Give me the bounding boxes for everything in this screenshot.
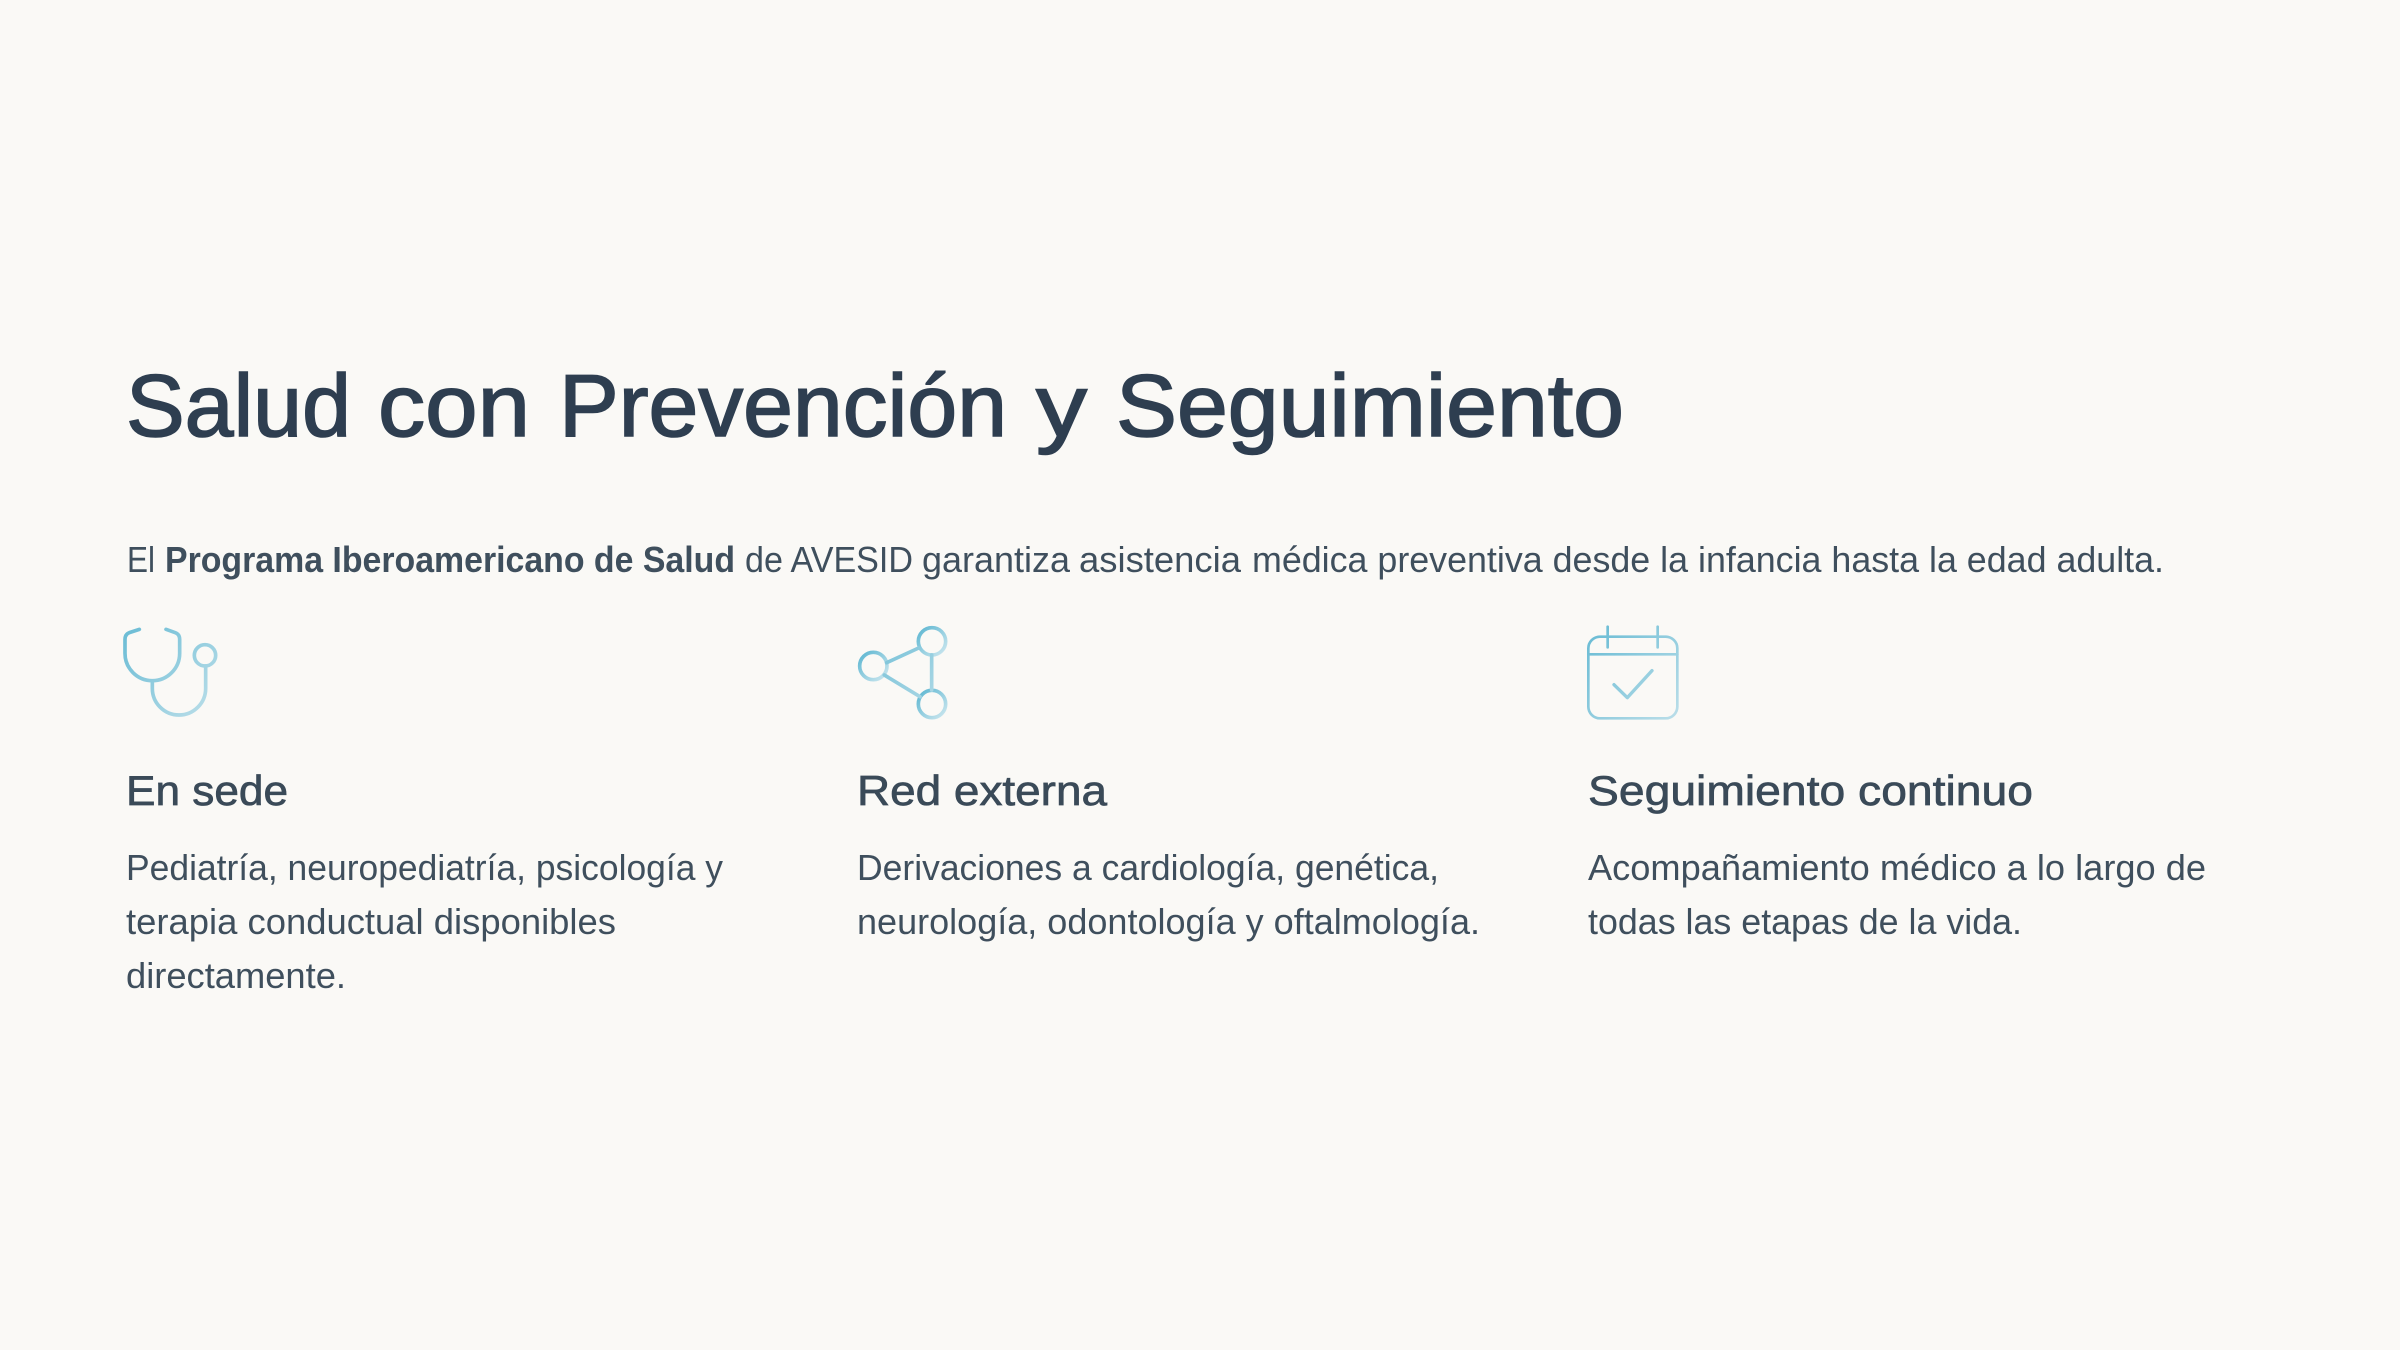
heading: Seguimiento continuo: Seguimiento continuo xyxy=(1588,767,2033,814)
title: Seguimiento xyxy=(1116,356,1624,455)
text: Red externa description: Derivaciones a cardiología, genética, xyxy=(857,847,1439,888)
icon: network nodes xyxy=(860,628,946,718)
title: con xyxy=(378,356,530,455)
column: En sede xyxy=(126,767,723,996)
heading: En sede: En sede xyxy=(126,767,288,814)
icon: calendar with check xyxy=(1588,627,1677,718)
text: En sede description: Pediatría, neuropediatría, psicología y xyxy=(126,847,723,888)
intro paragraph: de AVESID xyxy=(745,539,913,580)
intro paragraph: médica preventiva desde la infancia hasta la edad adulta. xyxy=(1252,539,2164,580)
intro paragraph: El xyxy=(127,539,155,580)
heading: Red externa: Red externa xyxy=(857,767,1108,814)
text: En sede description xyxy=(126,847,723,996)
text: Seguimiento continuo description: todas las etapas de la vida. xyxy=(1588,901,2022,942)
title: y xyxy=(1036,356,1087,455)
text: Red externa description xyxy=(857,847,1480,942)
intro paragraph xyxy=(127,539,2164,580)
text: Red externa description: neurología, odontología y oftalmología. xyxy=(857,901,1480,942)
text: En sede description: terapia conductual disponibles xyxy=(126,901,616,942)
intro paragraph: Programa Iberoamericano de Salud xyxy=(165,539,735,580)
intro paragraph: asistencia xyxy=(1079,539,1242,580)
text: Seguimiento continuo description xyxy=(1588,847,2206,942)
title xyxy=(126,356,1624,455)
title: Prevención xyxy=(559,356,1007,455)
text: Seguimiento continuo description: Acompañamiento médico a lo largo de xyxy=(1588,847,2206,888)
column: Seguimiento continuo xyxy=(1588,767,2206,942)
intro paragraph: garantiza xyxy=(922,539,1071,580)
title: Salud xyxy=(126,356,351,455)
icon: stethoscope xyxy=(125,629,216,715)
text: En sede description: directamente. xyxy=(126,955,346,996)
column: Red externa xyxy=(857,767,1480,942)
